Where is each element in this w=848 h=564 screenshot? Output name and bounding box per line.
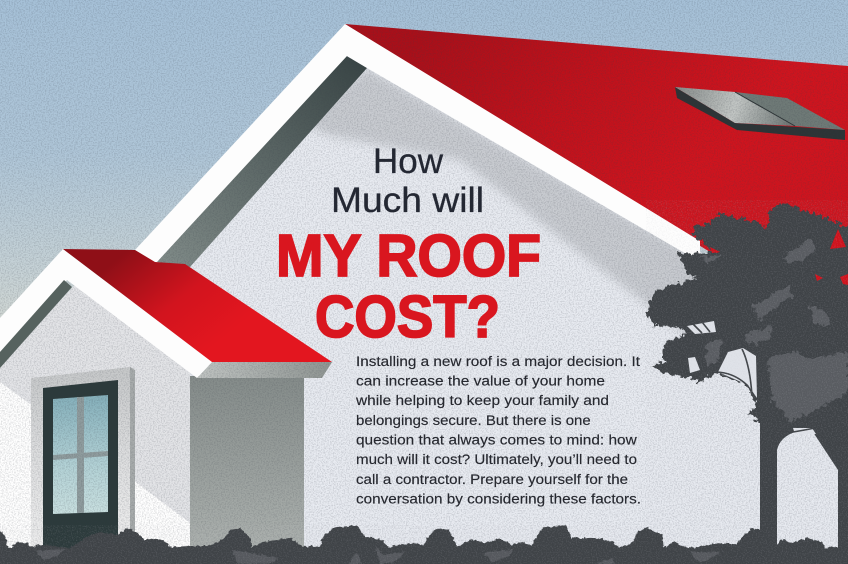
intro text block: can increase the value of your home	[356, 374, 605, 390]
title line: My Roof Cost: MY ROOF	[276, 223, 541, 289]
icon: skylight	[675, 87, 845, 140]
intro text block	[355, 354, 641, 508]
main roof dark soffit band	[157, 55, 367, 267]
tree crown silhouette	[647, 202, 848, 443]
panel: main gable wall	[140, 40, 848, 564]
grain on dark foliage	[0, 200, 848, 564]
title line: My Roof Cost	[276, 223, 541, 350]
hedge	[0, 525, 848, 564]
intro text block: belongings secure. But there is one	[356, 413, 591, 429]
intro text block: question that always comes to mind: how	[356, 433, 638, 449]
title line: How Much will: How	[373, 142, 444, 181]
title line: My Roof Cost: COST?	[315, 284, 500, 350]
small roof eave underside	[197, 362, 332, 378]
tree branches	[692, 322, 815, 432]
intro text block: conversation by considering these factors.	[356, 492, 641, 508]
intro text block: call a contractor. Prepare yourself for the	[356, 472, 628, 488]
panel: small house front wall	[0, 285, 190, 564]
wall shadow under roof	[300, 68, 720, 345]
door surround	[31, 367, 135, 552]
tree trunks	[760, 405, 848, 552]
title line: How Much will	[331, 142, 484, 220]
small house dark soffit	[0, 280, 72, 368]
door with window	[43, 380, 118, 552]
small red roof	[63, 249, 332, 362]
small house side wall	[190, 376, 304, 556]
small house white fascia	[0, 249, 212, 378]
tree lighter foliage	[700, 238, 848, 422]
intro text block: much will it cost? Ultimately, you’ll need to	[356, 452, 637, 468]
panel: main red roof	[345, 24, 848, 338]
red gaps in tree	[710, 229, 848, 285]
hedge lighter foliage	[36, 545, 720, 564]
sky background	[0, 0, 848, 340]
title line: How Much will: Much will	[331, 181, 484, 220]
small house wall shadow	[0, 285, 190, 523]
tree	[647, 202, 848, 552]
intro text block: Installing a new roof is a major decision. It	[356, 354, 640, 370]
wall gaps in tree	[687, 321, 816, 434]
title	[276, 142, 541, 350]
main roof white fascia	[135, 24, 700, 264]
intro text block: while helping to keep your family and	[355, 393, 609, 409]
